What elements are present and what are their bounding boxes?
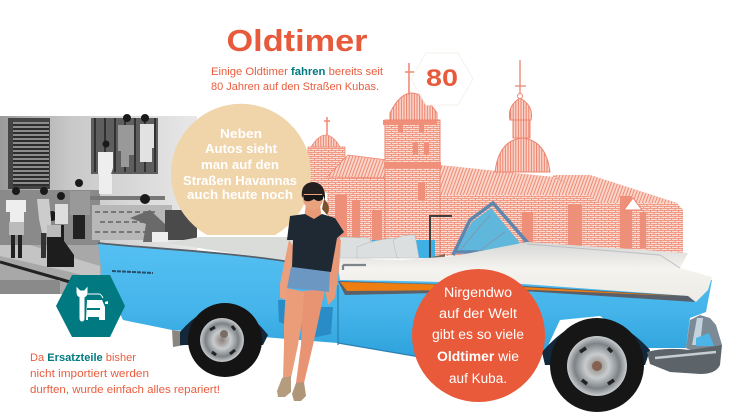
left small tower (308, 117, 345, 192)
portico (327, 155, 387, 256)
side stripe (338, 281, 695, 302)
windshield (372, 203, 527, 262)
beige circle: Havana streets: auch heute noch (187, 187, 293, 202)
spare parts text: Da Ersatzteile bisher (30, 352, 136, 364)
shadow behind woman (278, 300, 333, 338)
rear deck (167, 237, 300, 262)
right nave roof (553, 175, 683, 256)
boots (277, 376, 291, 397)
arched windows and gable (522, 196, 646, 249)
spare parts text (30, 352, 220, 396)
main tower (383, 63, 441, 256)
legs (283, 288, 306, 378)
script emblem (112, 271, 153, 273)
white upper body and hood (337, 242, 712, 302)
intro text (211, 66, 383, 93)
chrome bumper (647, 315, 722, 374)
title: Oldtimer (226, 23, 368, 58)
intro text: Einige Oldtimer fahren bereits seit (211, 66, 383, 78)
illustration: Havana church (308, 60, 683, 256)
red circle callout: auf der Welt (439, 306, 517, 321)
red circle callout: Oldtimer wie (437, 349, 519, 364)
main nave (440, 165, 580, 256)
door seam and handle (338, 285, 420, 357)
red circle callout: Nirgendwo (444, 285, 512, 300)
arms (280, 240, 296, 300)
red circle callout: auf Kuba. (449, 371, 507, 386)
woman (277, 182, 344, 401)
photo: children playing in a Havana street (0, 114, 197, 294)
red circle callout: gibt es so viele (432, 327, 524, 342)
head (303, 186, 323, 210)
beige circle: Havana streets: man auf den (201, 157, 279, 172)
intro text: 80 Jahren auf den Straßen Kubas. (211, 81, 379, 93)
mudflap (172, 330, 185, 347)
beige circle: Havana streets: Neben (220, 126, 262, 141)
red circle callout (412, 269, 545, 402)
rear wheel (180, 303, 268, 377)
icon: wrench and car hexagon (56, 275, 125, 337)
number: 80: 80 (426, 65, 458, 92)
seats (340, 235, 419, 258)
ponytail (322, 199, 329, 215)
big dome (495, 60, 550, 172)
spare parts text: durften, wurde einfach alles repariert! (30, 384, 220, 396)
neck (304, 205, 322, 226)
car body (98, 243, 712, 357)
shorts (287, 267, 330, 292)
beige circle: Havana streets (171, 104, 311, 235)
white hexagon behind number (411, 53, 473, 105)
front wheel (542, 318, 650, 412)
black top (287, 214, 344, 272)
beige circle: Havana streets: Straßen Havannas (183, 173, 297, 188)
spare parts text: nicht importiert werden (30, 368, 149, 380)
sunglasses (303, 195, 323, 201)
blue convertible car (98, 203, 722, 412)
beige circle: Havana streets: Autos sieht (205, 141, 278, 156)
